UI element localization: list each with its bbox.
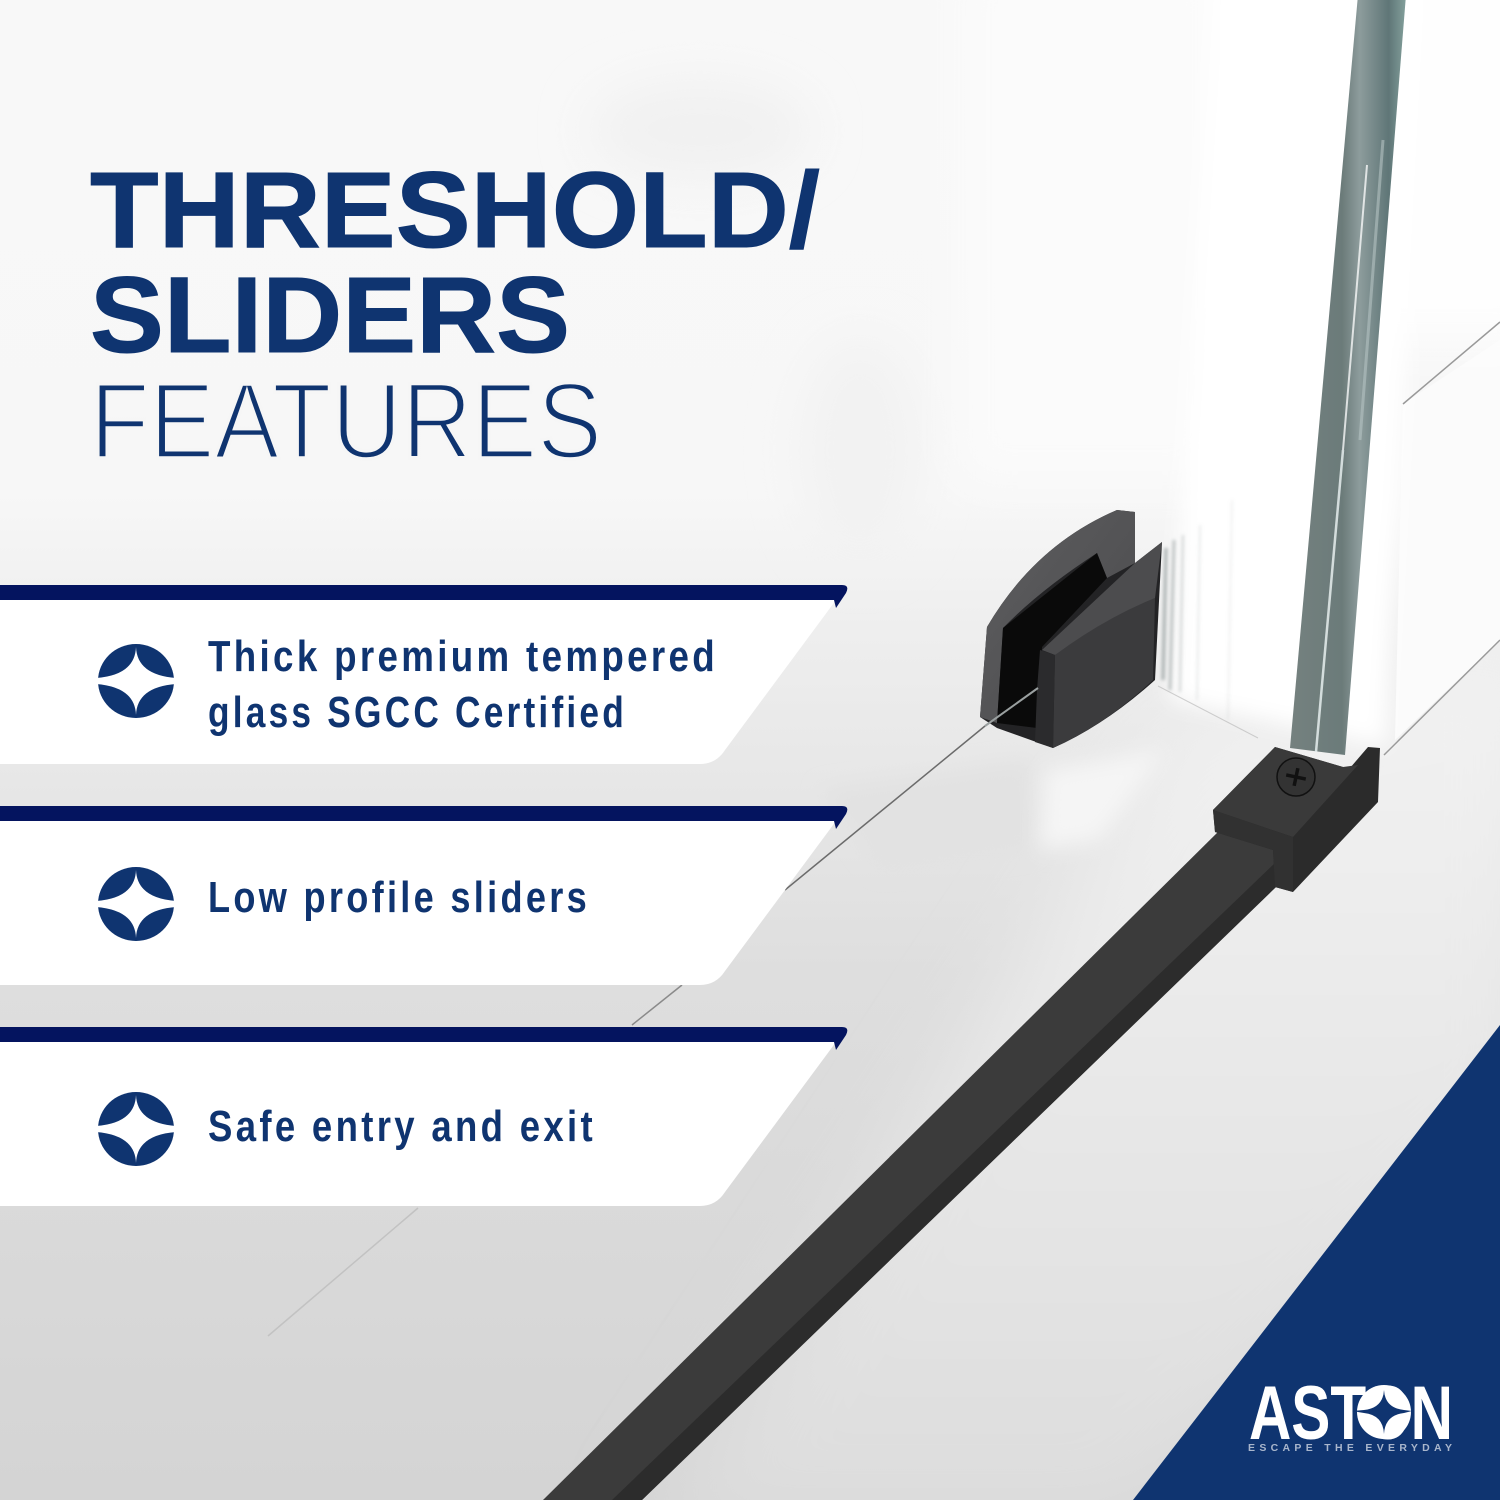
- feature text: Safe entry and exit: [208, 1102, 596, 1151]
- bracket front face: [1213, 810, 1293, 892]
- rail side edge: [612, 862, 1276, 1500]
- panel: safe entry: [0, 1027, 847, 1206]
- back plate: [980, 510, 1135, 723]
- screw: [1277, 758, 1315, 796]
- icon: star badge: [96, 644, 176, 718]
- icon: star badge: [96, 1092, 176, 1166]
- corner triangle: [1133, 1025, 1500, 1500]
- thin glass panel lines on floor: [268, 322, 1500, 1336]
- logo O disc: [1357, 1385, 1411, 1439]
- title: [90, 149, 820, 481]
- logo star: [1352, 1390, 1412, 1434]
- glass pane and edge: [1158, 0, 1425, 755]
- rail threshold: [543, 827, 1276, 1500]
- front block face: [1053, 598, 1155, 748]
- panel top bar: [0, 585, 847, 608]
- panel top bar: [0, 806, 847, 829]
- tagline: ESCAPE THE EVERYDAY: [1248, 1442, 1452, 1454]
- front block edge: [1035, 650, 1055, 748]
- feature text: glass SGCC Certified: [208, 688, 627, 737]
- title: FEATURES: [90, 360, 602, 481]
- small glass guide slider: [980, 510, 1162, 748]
- panel: tempered glass: [0, 585, 847, 764]
- feature text: Low profile sliders: [208, 873, 590, 922]
- title: SLIDERS: [90, 254, 570, 375]
- panel top bar: [0, 1027, 847, 1050]
- title: THRESHOLD/: [90, 149, 820, 270]
- panel: low profile sliders: [0, 806, 847, 985]
- glass through slider: [985, 688, 1038, 726]
- guide channel: [997, 553, 1107, 728]
- feature text: Thick premium tempered: [208, 632, 718, 681]
- bracket top face: [1213, 747, 1358, 837]
- icon: star badge: [96, 867, 176, 941]
- rail end bracket with screw: [1213, 747, 1380, 892]
- feature text: [208, 632, 718, 737]
- front block top face: [1042, 542, 1162, 655]
